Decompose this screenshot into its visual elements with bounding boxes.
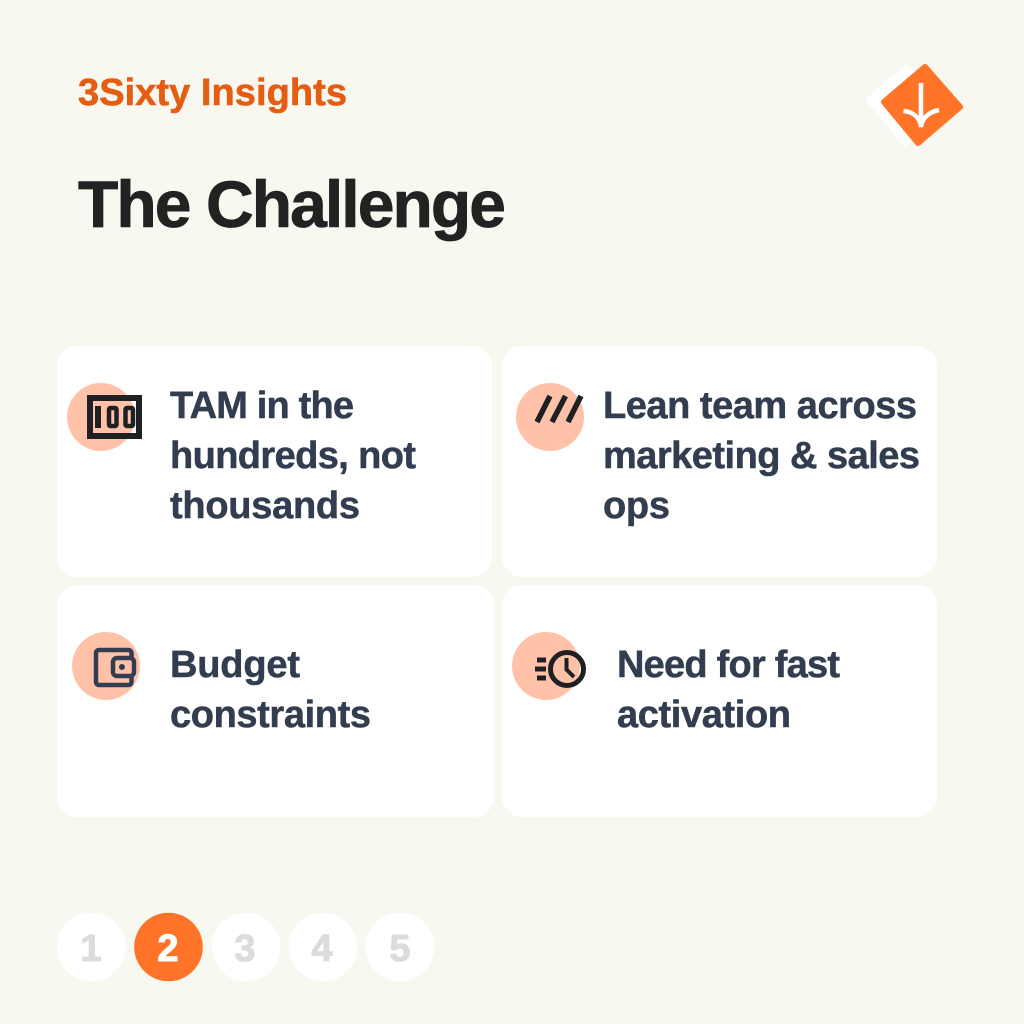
page 4: 4: [311, 928, 333, 970]
brand name: 3Sixty Insights: [78, 72, 347, 114]
icon: fast clock: [512, 632, 584, 700]
text: fast activation: [617, 644, 840, 736]
text: lean team: marketing & sales: [603, 435, 920, 477]
page 5: 5: [389, 928, 411, 970]
text: budget: constraints: [170, 694, 371, 736]
page 5: [366, 913, 434, 981]
page 4: [289, 913, 357, 981]
panel: TAM: [57, 346, 492, 577]
pagination: [57, 913, 434, 981]
page 1: 1: [80, 928, 102, 970]
icon: wallet: [72, 632, 140, 700]
panel: lean team: [502, 346, 937, 577]
text: fast activation: Need for fast: [617, 644, 840, 686]
page 2 current: [134, 913, 203, 981]
panel: budget: [57, 585, 494, 817]
page 3: 3: [234, 928, 256, 970]
text: lean team: ops: [603, 485, 670, 527]
page 1: [57, 913, 126, 981]
text: fast activation: activation: [617, 694, 791, 736]
panel: fast activation: [502, 585, 937, 817]
text: TAM: hundreds, not: [170, 435, 416, 477]
text: budget: [170, 644, 371, 736]
page 3: [212, 913, 280, 981]
text: lean team: [603, 385, 920, 527]
text: budget: Budget: [170, 644, 300, 686]
text: TAM: [170, 385, 416, 527]
icon: 100 counter: [67, 383, 139, 451]
page 2 current: 2: [157, 928, 179, 970]
icon: three slashes: [516, 383, 584, 451]
title: The Challenge: [78, 167, 506, 241]
icon: logo diamond with arrow: [869, 67, 960, 143]
text: TAM: TAM in the: [170, 385, 354, 427]
text: TAM: thousands: [170, 485, 360, 527]
text: lean team: Lean team across: [603, 385, 917, 427]
